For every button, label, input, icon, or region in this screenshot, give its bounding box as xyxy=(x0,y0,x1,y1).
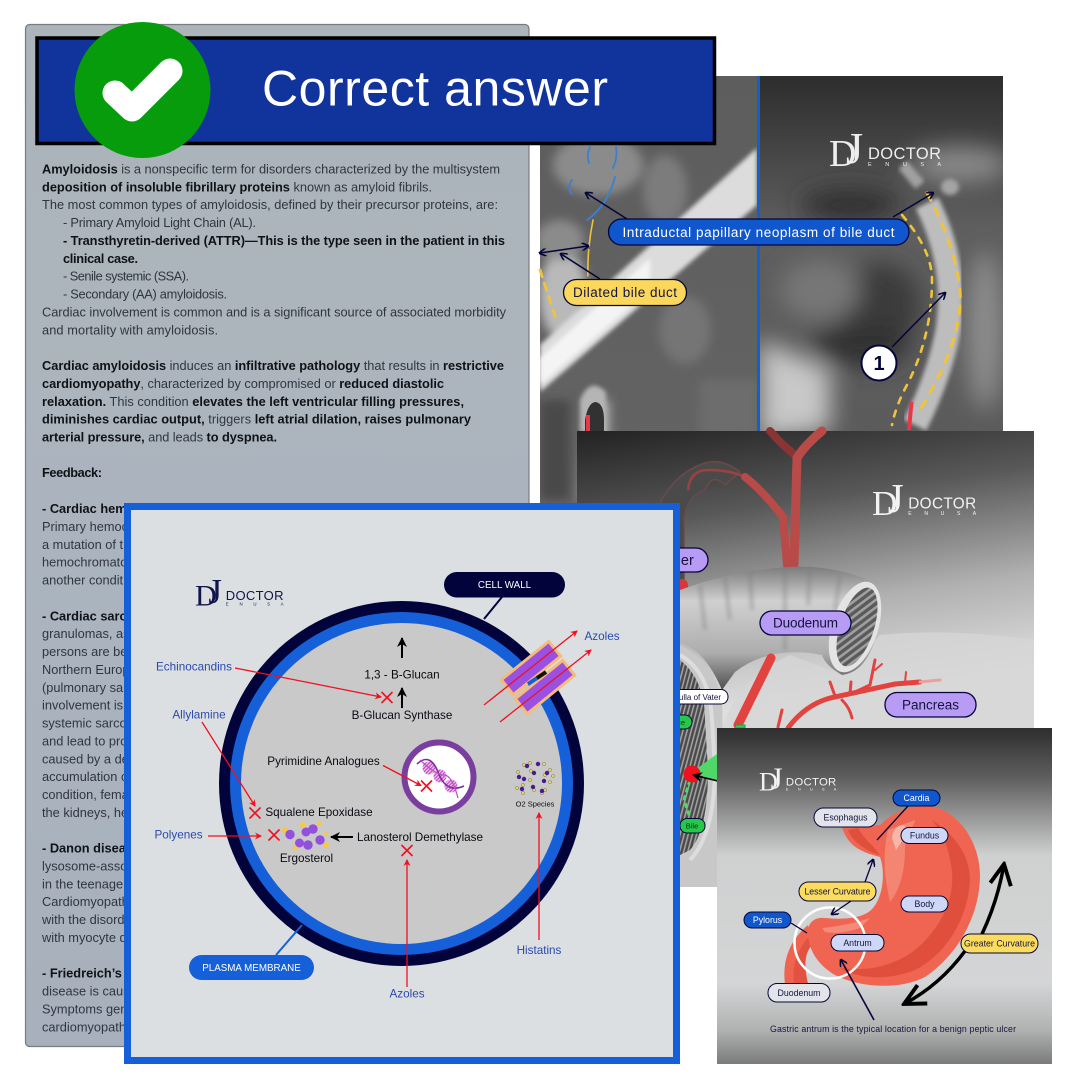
molecular labels, black xyxy=(265,668,555,865)
red bile ducts xyxy=(682,431,822,635)
divider between x-ray panes xyxy=(757,76,760,432)
logo: doctor en usa: D xyxy=(759,767,778,796)
label: gallbladder xyxy=(600,548,708,572)
text block: feedback on differential diagnoses: accumulation of sphingolipids xyxy=(42,769,209,784)
membrane channels xyxy=(499,639,577,716)
marker: number 1 xyxy=(862,346,896,380)
logo: doctor en usa: D xyxy=(829,133,856,175)
panel: pancreas and duodenum anatomy xyxy=(577,431,1034,887)
logo: doctor en usa: DOCTOR xyxy=(868,145,941,163)
label: fundus xyxy=(901,828,948,844)
yellow dashed duct outline, right xyxy=(892,193,960,425)
text block: feedback on differential diagnoses xyxy=(41,501,275,1034)
label: lesser curvature xyxy=(799,882,876,901)
label: greater curvature: Greater Curvature xyxy=(964,938,1035,948)
drug labels, blue: Polyenes xyxy=(154,828,203,842)
label: pylorus: Pylorus xyxy=(753,915,783,925)
text block: amyloidosis overview: deposition of insoluble fibrillary proteins known as amyloid fibrils. xyxy=(42,179,432,194)
logo: doctor en usa: D xyxy=(872,484,898,523)
yellow dashed duct outline, left xyxy=(540,220,593,322)
text block: cardiac amyloidosis xyxy=(42,358,504,444)
descending duodenum xyxy=(680,645,735,887)
label: cell wall: CELL WALL xyxy=(478,580,532,591)
black pathway arrows xyxy=(331,638,402,837)
label: fundus: Fundus xyxy=(910,830,940,840)
duodenum tube xyxy=(680,567,891,690)
drug labels, blue: Azoles xyxy=(389,988,425,1000)
red x marks xyxy=(250,692,432,856)
banner title: Correct answer xyxy=(262,60,608,116)
logo: doctor en usa: D xyxy=(195,579,217,612)
label: cardia xyxy=(893,790,940,806)
molecular labels, black: Lanosterol Demethylase xyxy=(357,831,483,844)
text block: feedback on differential diagnoses: Primary hemochromatosis is caused by xyxy=(42,519,266,534)
logo: doctor en usa: E N U S A xyxy=(908,511,977,517)
logo: doctor en usa: E N U S A xyxy=(226,601,284,606)
label: gallbladder: Gallbladder xyxy=(620,553,694,569)
logo: doctor en usa: DOCTOR xyxy=(908,495,976,512)
text block: feedback on differential diagnoses: with the disorder and associated xyxy=(41,912,226,927)
panel: antifungal mechanisms xyxy=(128,506,676,1060)
icon: green check mark xyxy=(74,22,210,158)
logo: doctor en usa xyxy=(872,476,977,523)
logo: doctor en usa: DOCTOR xyxy=(226,588,283,603)
label: pancreatic juice: Juice xyxy=(667,718,685,727)
text block: amyloidosis overview: Cardiac involvement is common and is a significant source of associated morbidity xyxy=(42,304,507,320)
text block: feedback on differential diagnoses: - Friedreich’s ataxia: xyxy=(42,966,166,981)
label: antrum: Antrum xyxy=(843,938,872,948)
molecular labels, black: Ergosterol xyxy=(280,852,333,865)
text block: amyloidosis overview: - Secondary (AA) amyloidosis. xyxy=(63,287,227,302)
text block: cardiac amyloidosis: cardiomyopathy, characterized by compromised or reduced diastolic xyxy=(42,376,444,391)
label: pylorus xyxy=(744,912,791,928)
label: esophagus: Esophagus xyxy=(823,812,868,822)
oxygen species dots xyxy=(515,761,555,795)
molecular labels, black: Squalene Epoxidase xyxy=(265,806,373,819)
label: cardia: Cardia xyxy=(904,793,930,803)
label: intraductal papillary neoplasm xyxy=(608,219,909,245)
label: pancreas: Pancreas xyxy=(902,698,959,712)
text block: feedback on differential diagnoses: and lead to progressive disease xyxy=(42,733,223,748)
x-ray right pane xyxy=(760,76,1003,431)
text block: amyloidosis overview: The most common types of amyloidosis, defined by their precursor proteins, are: xyxy=(42,197,498,212)
label: cell wall xyxy=(444,572,565,619)
label: body: Body xyxy=(914,899,935,909)
red catheter marks xyxy=(588,402,912,431)
text block: feedback on differential diagnoses: granulomas, as seen in sarcoidosis xyxy=(42,626,242,641)
arrow: greater curvature xyxy=(904,864,1004,1004)
molecular labels, black: B-Glucan Synthase xyxy=(352,709,452,722)
molecular labels, black: O2 Species xyxy=(516,800,555,808)
ergosterol molecule xyxy=(282,822,329,850)
text block: cardiac amyloidosis: Cardiac amyloidosis induces an infiltrative pathology that results in restrictive xyxy=(42,358,504,373)
text block: feedback on differential diagnoses: Northern Europeans and African xyxy=(42,662,225,677)
text block: feedback on differential diagnoses: condition, females are carriers xyxy=(42,787,213,802)
drug labels, blue xyxy=(154,630,620,1000)
text block: feedback on differential diagnoses: (pulmonary sarcoidosis is most common) xyxy=(42,680,275,695)
text block: amyloidosis overview: and mortality with amyloidosis. xyxy=(42,322,218,337)
logo: doctor en usa xyxy=(829,124,941,175)
ampulla of vater marker xyxy=(684,754,718,818)
text block: cardiac amyloidosis: arterial pressure, and leads to dyspnea. xyxy=(42,430,277,444)
logo: doctor en usa xyxy=(195,572,284,612)
label: lesser curvature: Lesser Curvature xyxy=(804,886,871,896)
label: duodenum: Duodenum xyxy=(777,988,821,998)
label: duodenum: Duodenum xyxy=(773,616,838,630)
pancreatic vessel xyxy=(738,658,940,728)
arrows: pointers xyxy=(791,806,908,1020)
text block: feedback on differential diagnoses: with myocyte degeneration xyxy=(41,930,194,945)
nucleus with dna xyxy=(404,742,474,812)
label: bile xyxy=(680,818,705,833)
caption: gastric antrum: Gastric antrum is the typical location for a benign peptic ulcer xyxy=(770,1024,1016,1034)
label: duodenum xyxy=(760,611,851,635)
text block: feedback on differential diagnoses: the kidneys, heart and nerves xyxy=(42,805,210,820)
text block: feedback on differential diagnoses: cardiomyopathy may be present xyxy=(42,1019,225,1034)
drug labels, blue: Echinocandins xyxy=(156,660,232,674)
blue dashed neoplasm outline xyxy=(569,147,617,220)
text block: feedback on differential diagnoses: - Cardiac hemochromatosis: xyxy=(42,501,215,516)
panel: x-ray of bile duct xyxy=(536,76,1010,506)
text block: feedback on differential diagnoses: involvement is uncommon in xyxy=(42,698,203,713)
text block: feedback on differential diagnoses: disease is caused by frataxin mutation xyxy=(42,984,259,998)
drug labels, blue: Histatins xyxy=(517,944,562,957)
text block: feedback on differential diagnoses: Cardiomyopathy is a prominent feature xyxy=(42,894,263,909)
panel: stomach anatomy xyxy=(717,728,1052,1064)
diagram: fungal cell xyxy=(219,601,584,966)
text block: amyloidosis overview: clinical case. xyxy=(63,251,138,266)
illustration: stomach xyxy=(784,806,980,986)
red inhibition arrows xyxy=(202,631,591,987)
logo: doctor en usa: J xyxy=(208,572,222,611)
logo: doctor en usa: J xyxy=(846,124,863,173)
text block: feedback on differential diagnoses: hemochromatosis can result from xyxy=(42,555,231,570)
text block: feedback on differential diagnoses: in the teenage years or early adulthood xyxy=(42,876,264,891)
text block: feedback on differential diagnoses: Symptoms generally begin in childhood xyxy=(42,1001,265,1016)
text block: feedback on differential diagnoses: caused by a deficiency of the enzyme xyxy=(42,751,255,766)
text block: amyloidosis overview xyxy=(42,162,507,337)
label: pancreas xyxy=(885,692,976,717)
label: body xyxy=(901,896,948,912)
label: antrum xyxy=(831,934,884,951)
heading: feedback: Feedback: xyxy=(42,465,102,480)
text block: cardiac amyloidosis: relaxation. This condition elevates the left ventricular filling pressures, xyxy=(42,394,464,409)
drug labels, blue: Allylamine xyxy=(172,708,226,722)
label: ampulla of vater xyxy=(640,690,728,704)
drug labels, blue: Azoles xyxy=(584,630,620,643)
molecular labels, black: Pyrimidine Analogues xyxy=(267,755,380,768)
label: duodenum xyxy=(768,984,830,1002)
logo: doctor en usa: E N U S A xyxy=(786,787,837,791)
text block: feedback on differential diagnoses: another condition with iron overload xyxy=(42,572,244,588)
pancreas body xyxy=(720,632,1034,770)
x-ray left pane xyxy=(540,145,757,503)
label: plasma membrane xyxy=(189,925,314,980)
text block: feedback on differential diagnoses: - Danon disease: xyxy=(42,841,144,856)
marker: number 1: 1 xyxy=(873,353,885,375)
pancreatic duct junction xyxy=(735,725,745,728)
text block: feedback on differential diagnoses: - Cardiac sarcoidosis: xyxy=(42,608,176,623)
label: ampulla of vater: Ampulla of Vater xyxy=(662,693,721,702)
text block: amyloidosis overview: - Senile systemic (SSA). xyxy=(63,269,189,284)
logo: doctor en usa: E N U S A xyxy=(868,162,941,168)
text block: feedback on differential diagnoses: a mutation of the HFE gene and xyxy=(42,537,223,552)
banner: correct answer xyxy=(37,22,714,158)
logo: doctor en usa: J xyxy=(888,476,904,521)
text block: feedback on differential diagnoses: systemic sarcoidosis and may xyxy=(42,716,213,730)
text block: amyloidosis overview: - Primary Amyloid Light Chain (AL). xyxy=(63,215,256,230)
label: plasma membrane: PLASMA MEMBRANE xyxy=(202,963,301,974)
panel: explanation text xyxy=(26,24,529,1046)
logo: doctor en usa: DOCTOR xyxy=(786,777,836,789)
label: dilated bile duct: Dilated bile duct xyxy=(573,285,677,300)
gallbladder neck xyxy=(653,462,745,600)
label: bile: Bile xyxy=(686,822,698,830)
logo: doctor en usa: J xyxy=(771,761,783,795)
label: intraductal papillary neoplasm: Intraductal papillary neoplasm of bile duct xyxy=(622,225,895,240)
text block: feedback on differential diagnoses: lysosome-associated membrane protein xyxy=(42,858,269,873)
label: pancreatic juice xyxy=(640,715,692,729)
label: esophagus xyxy=(814,808,877,827)
text block: cardiac amyloidosis: diminishes cardiac output, triggers left atrial dilation, raises pulmonary xyxy=(42,412,472,427)
annotation arrows xyxy=(540,193,945,347)
text block: amyloidosis overview: Amyloidosis is a nonspecific term for disorders characterized by the multisystem xyxy=(42,162,500,176)
logo: doctor en usa xyxy=(759,761,837,796)
label: dilated bile duct xyxy=(564,280,686,306)
annotation circle: antrum xyxy=(794,908,866,978)
text block: feedback on differential diagnoses: persons are between 20 and 40 years xyxy=(42,644,257,659)
molecular labels, black: 1,3 - B-Glucan xyxy=(364,668,440,682)
text block: amyloidosis overview: - Transthyretin-derived (ATTR)—This is the type seen in the patient in this xyxy=(63,233,505,248)
label: greater curvature xyxy=(961,934,1038,953)
